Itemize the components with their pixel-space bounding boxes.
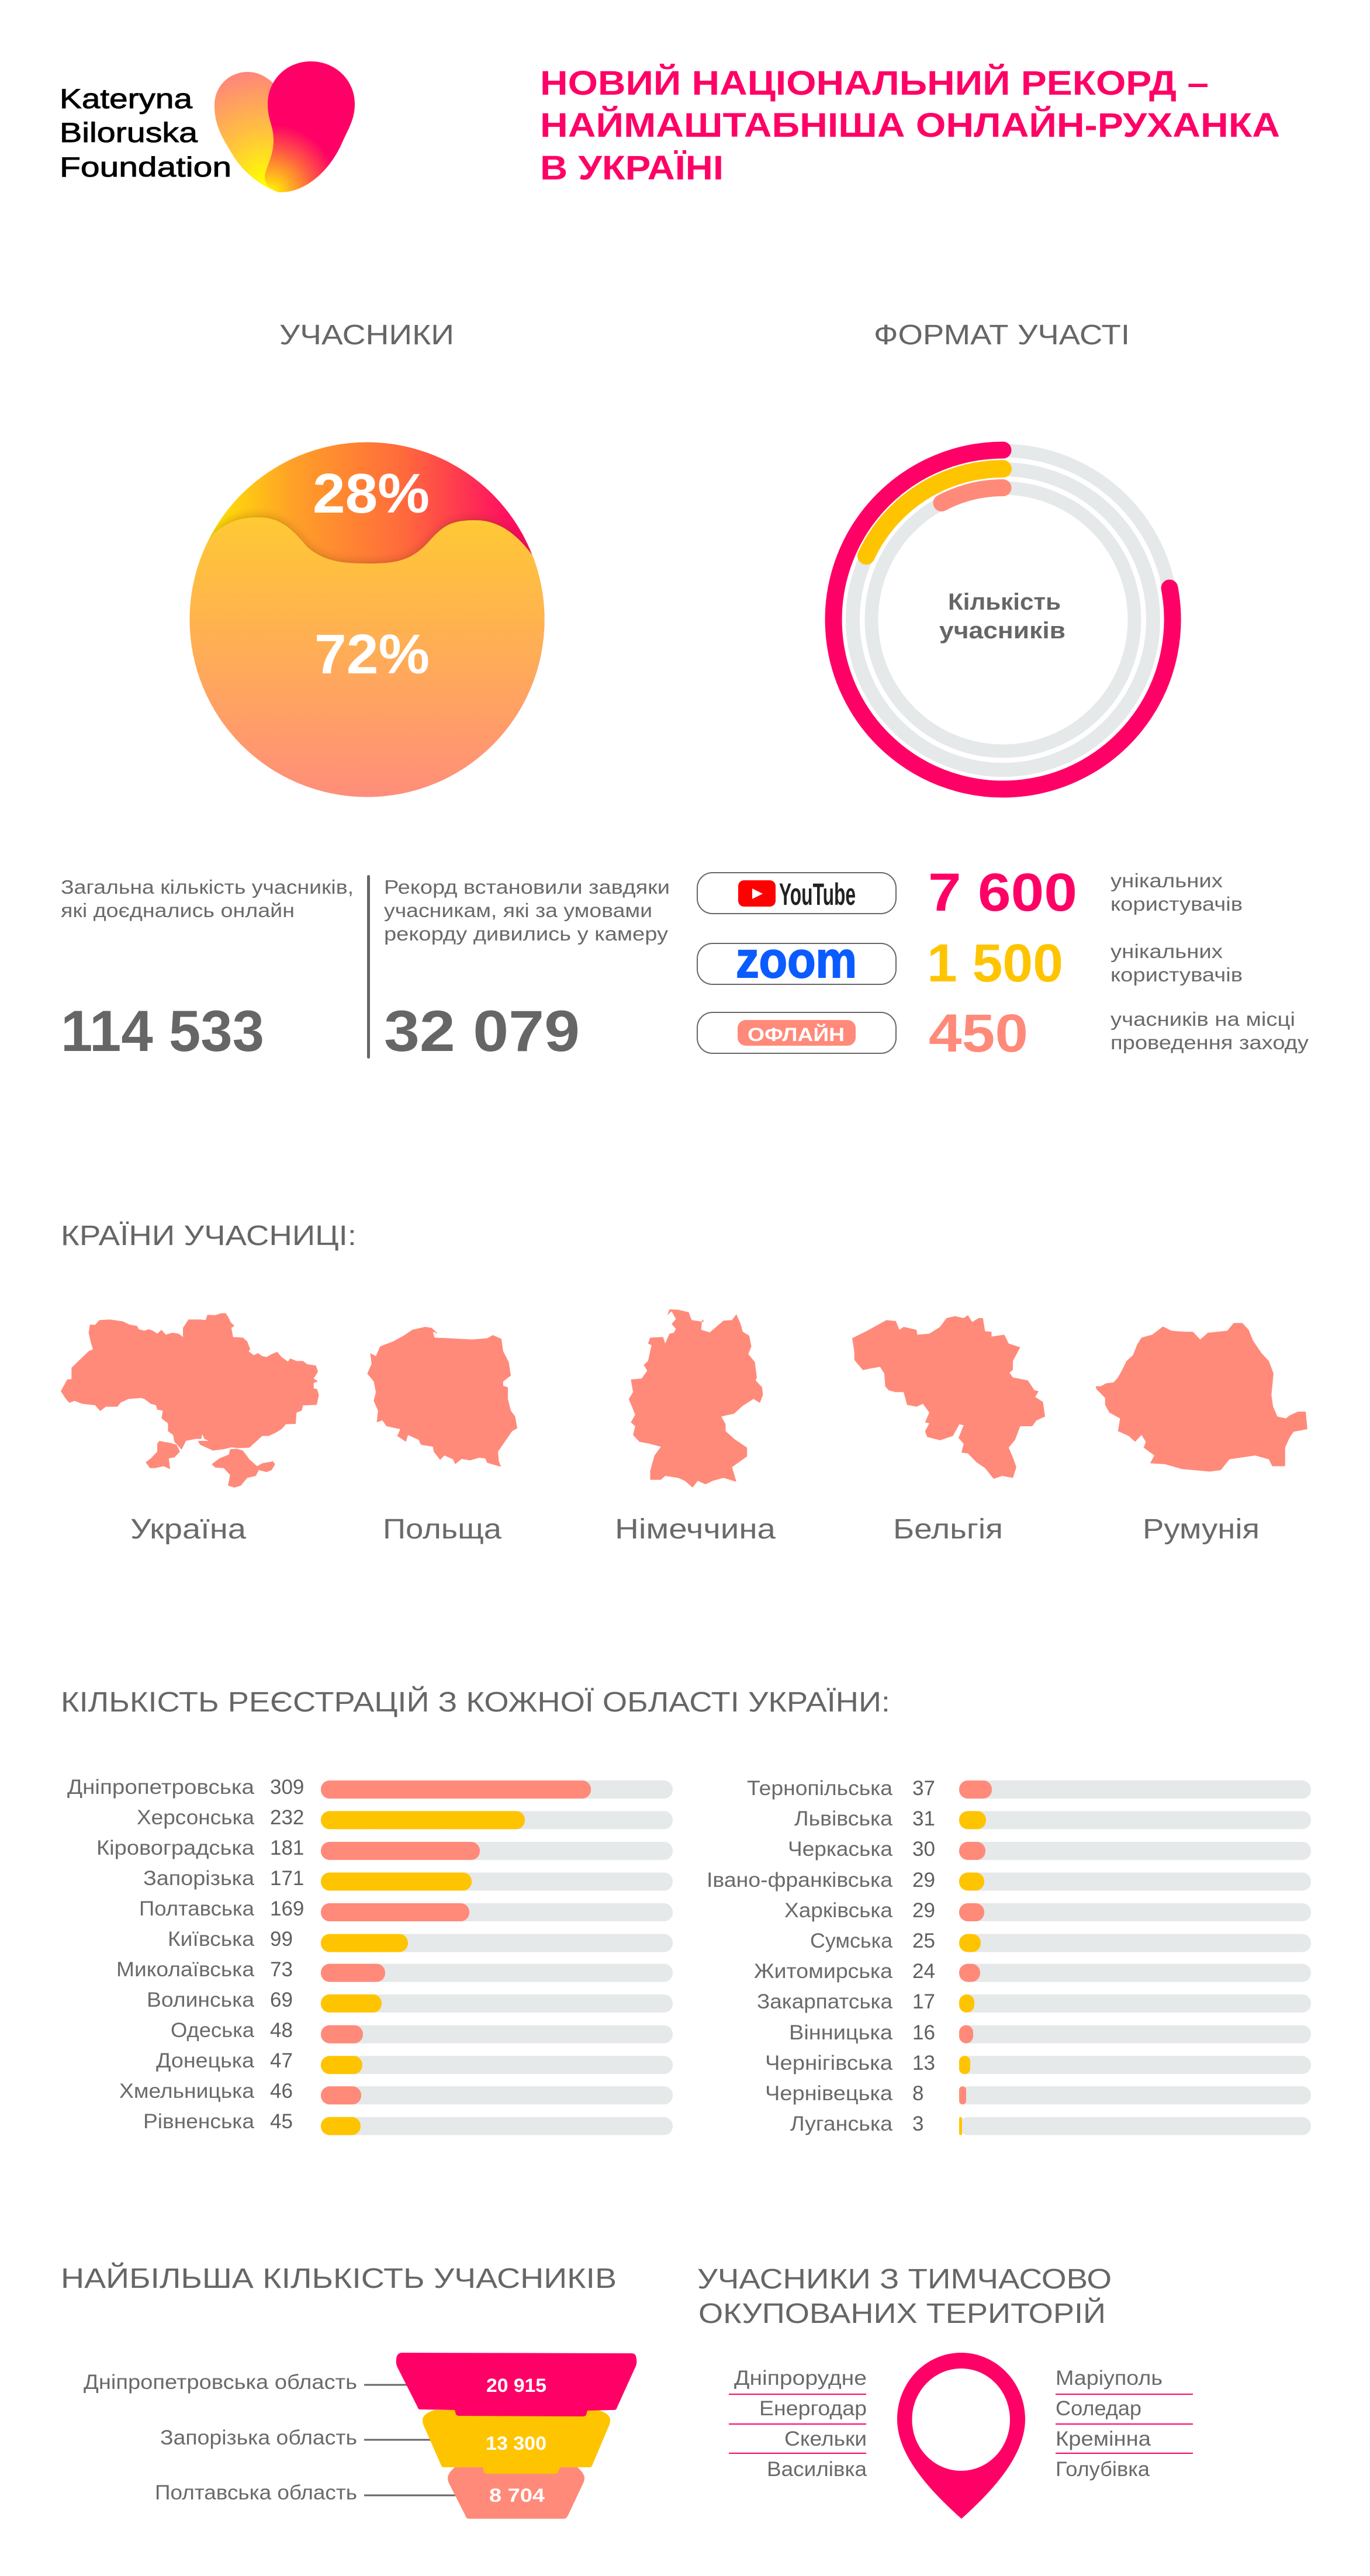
stat: record participants: 32 079	[384, 998, 580, 1063]
ring centre label: учасників	[939, 618, 1065, 644]
country names: Німеччина	[615, 1514, 776, 1545]
row: YouTube	[697, 863, 1243, 922]
region labels and values: 73	[270, 1958, 293, 1981]
arc: Zoom	[866, 469, 1003, 556]
funnel values	[486, 2375, 546, 2506]
bar chart: regions left column	[67, 1776, 673, 2135]
region labels and values: Вінницька	[789, 2021, 893, 2044]
icon: map pin	[897, 2353, 1025, 2519]
row: Zoom	[697, 932, 1243, 993]
country names: Бельгія	[893, 1514, 1003, 1545]
region labels and values: 29	[912, 1869, 935, 1892]
region labels and values: 24	[912, 1960, 935, 1983]
region labels and values: Запорізька	[143, 1867, 255, 1890]
heading: participants: УЧАСНИКИ	[279, 320, 454, 351]
stat: record participants: Рекорд встановили завдяки	[384, 876, 670, 898]
list: towns right	[1056, 2367, 1193, 2481]
stat: record participants	[384, 876, 670, 1063]
arc: YouTube	[833, 450, 1172, 789]
title: НАЙМАШТАБНІША ОНЛАЙН-РУХАНКА	[540, 106, 1280, 144]
map: Romania	[1096, 1323, 1307, 1472]
list: towns right: Соледар	[1056, 2397, 1141, 2420]
region labels and values: Сумська	[810, 1930, 893, 1952]
region labels and values: Харківська	[784, 1899, 893, 1922]
heading: occupied territories: ОКУПОВАНИХ ТЕРИТОРІЙ	[698, 2297, 1106, 2329]
list: towns left: Дніпрорудне	[734, 2367, 867, 2390]
region labels and values: Тернопільська	[747, 1777, 893, 1800]
region labels and values: 169	[270, 1897, 304, 1920]
radial chart: participation format	[833, 450, 1172, 789]
stat: total participants: Загальна кількість учасників,	[61, 876, 354, 898]
region labels and values: 69	[270, 1989, 293, 2011]
region labels and values: 232	[270, 1806, 304, 1829]
bar fills	[321, 1780, 591, 2135]
region labels and values: 8	[912, 2082, 923, 2105]
region labels and values: 45	[270, 2110, 293, 2133]
region labels and values: Львівська	[794, 1807, 893, 1830]
region labels and values: Івано-франківська	[707, 1869, 893, 1892]
funnel values: 13 300	[486, 2433, 546, 2454]
list: towns left: Енергодар	[759, 2397, 867, 2420]
country names	[130, 1514, 1260, 1545]
region labels and values: Херсонська	[137, 1806, 255, 1829]
stat: total participants: 114 533	[61, 998, 264, 1063]
stat: record participants: рекорду дивились у камеру	[384, 923, 669, 945]
stat: record participants: учасникам, які за умовами	[384, 900, 652, 921]
pie chart: 28% and 72%: 72%	[314, 623, 430, 686]
title	[540, 64, 1280, 187]
list: towns right: Маріуполь	[1056, 2367, 1163, 2390]
list: towns left: Скельки	[784, 2428, 867, 2450]
heading: occupied territories: УЧАСНИКИ З ТИМЧАСОВО	[697, 2264, 1112, 2295]
logo wordmark: Kateryna	[60, 83, 193, 114]
row: offline: учасників на місці	[1110, 1008, 1295, 1030]
region labels and values: 47	[270, 2049, 293, 2072]
map: Belgium	[852, 1315, 1045, 1479]
bar chart: regions right column	[707, 1777, 1311, 2135]
title: НОВИЙ НАЦІОНАЛЬНИЙ РЕКОРД –	[540, 64, 1209, 102]
funnel values: 8 704	[489, 2485, 545, 2506]
heading: largest number of participants: НАЙБІЛЬША КІЛЬКІСТЬ УЧАСНИКІВ	[61, 2262, 617, 2294]
ring centre label	[939, 589, 1065, 644]
ring tracks	[834, 451, 1172, 789]
region labels and values: 13	[912, 2052, 935, 2074]
region labels and values: Хмельницька	[119, 2080, 255, 2103]
heading: occupied territories	[697, 2264, 1112, 2329]
region labels and values: Київська	[168, 1928, 255, 1951]
list: towns left	[729, 2367, 867, 2481]
badge: offline: ОФЛАЙН	[748, 1024, 845, 1045]
funnel level 1	[396, 2353, 636, 2416]
logo	[60, 61, 355, 192]
leader lines	[364, 2385, 459, 2495]
row: YouTube: унікальних	[1110, 870, 1223, 891]
funnel labels: Дніпропетровська область	[84, 2371, 357, 2394]
logo wordmark	[60, 83, 231, 182]
row: Zoom: 1 500	[927, 933, 1063, 993]
region labels and values	[67, 1776, 304, 2133]
region labels and values: 46	[270, 2080, 293, 2103]
row: Zoom: унікальних	[1110, 941, 1223, 962]
funnel labels: Запорізька область	[160, 2426, 357, 2449]
heading: participation format: ФОРМАТ УЧАСТІ	[874, 320, 1130, 351]
heading: countries: КРАЇНИ УЧАСНИЦІ:	[61, 1220, 357, 1251]
region labels and values: Рівненська	[143, 2110, 255, 2133]
funnel level 2	[423, 2410, 610, 2474]
region labels and values: Кіровоградська	[96, 1837, 255, 1859]
map: Poland	[367, 1327, 517, 1467]
stat: total participants	[61, 876, 354, 1063]
region labels and values: 309	[270, 1776, 304, 1799]
funnel values: 20 915	[486, 2375, 546, 2396]
bar tracks	[321, 1780, 673, 2135]
region labels and values: Чернівецька	[765, 2082, 893, 2105]
row: offline: 450	[929, 1004, 1028, 1063]
region labels and values: Чернігівська	[765, 2052, 893, 2074]
funnel labels: Полтавська область	[155, 2481, 357, 2504]
ring centre label: Кількість	[948, 589, 1061, 615]
bar fills	[959, 1780, 992, 2135]
region labels and values: 37	[912, 1777, 935, 1800]
list: towns right: Голубівка	[1056, 2458, 1150, 2481]
country names: Румунія	[1143, 1514, 1260, 1545]
stat: total participants: які доєднались онлайн	[61, 900, 295, 921]
badge: YouTube logo: YouTube	[779, 877, 856, 912]
region labels and values: 48	[270, 2019, 293, 2042]
heading: registrations by region: КІЛЬКІСТЬ РЕЄСТРАЦІЙ З КОЖНОЇ ОБЛАСТІ УКРАЇНИ:	[61, 1686, 890, 1718]
title: В УКРАЇНІ	[540, 149, 724, 187]
pie chart: 28% and 72%	[189, 442, 545, 797]
row: YouTube: 7 600	[928, 863, 1077, 922]
bar tracks	[959, 1780, 1311, 2135]
badge: Zoom logo	[697, 932, 896, 988]
map: Ukraine	[61, 1313, 319, 1488]
pie chart: 28% and 72%: 28%	[313, 462, 430, 525]
region labels and values	[707, 1777, 935, 2135]
row: YouTube: користувачів	[1110, 893, 1243, 915]
funnel level 3	[448, 2467, 584, 2519]
region labels and values: 25	[912, 1930, 935, 1952]
funnel chart	[84, 2353, 636, 2519]
funnel labels	[84, 2371, 357, 2504]
region labels and values: Волинська	[147, 1989, 255, 2011]
country names: Польща	[383, 1514, 501, 1545]
row: offline: проведення заходу	[1110, 1032, 1309, 1053]
icon: gradient heart	[215, 61, 355, 192]
arc: offline	[942, 487, 1003, 503]
region labels and values: Закарпатська	[757, 1990, 893, 2013]
logo wordmark: Biloruska	[60, 117, 198, 148]
badge: YouTube logo	[697, 873, 896, 914]
region labels and values: Дніпропетровська	[67, 1776, 255, 1799]
region labels and values: Черкаська	[788, 1838, 893, 1861]
list: towns left: Василівка	[767, 2458, 867, 2481]
region labels and values: Луганська	[790, 2112, 893, 2135]
region labels and values: Житомирська	[754, 1960, 893, 1983]
badge: offline	[697, 1012, 896, 1053]
row: offline	[697, 1004, 1309, 1063]
map: Germany	[629, 1309, 763, 1488]
region labels and values: 171	[270, 1867, 304, 1890]
row: Zoom: користувачів	[1110, 964, 1243, 986]
list: towns right: Кремінна	[1056, 2428, 1151, 2450]
region labels and values: 99	[270, 1928, 293, 1951]
region labels and values: Одеська	[171, 2019, 255, 2042]
region labels and values: 3	[912, 2112, 923, 2135]
region labels and values: Донецька	[156, 2049, 255, 2072]
badge: Zoom logo: zoom	[736, 932, 857, 988]
region labels and values: Миколаївська	[116, 1958, 255, 1981]
region labels and values: 29	[912, 1899, 935, 1922]
region labels and values: 181	[270, 1837, 304, 1859]
region labels and values: 31	[912, 1807, 935, 1830]
region labels and values: 17	[912, 1990, 935, 2013]
logo wordmark: Foundation	[60, 151, 231, 182]
region labels and values: Полтавська	[139, 1897, 255, 1920]
country names: Україна	[130, 1514, 246, 1545]
region labels and values: 16	[912, 2021, 935, 2044]
region labels and values: 30	[912, 1838, 935, 1861]
